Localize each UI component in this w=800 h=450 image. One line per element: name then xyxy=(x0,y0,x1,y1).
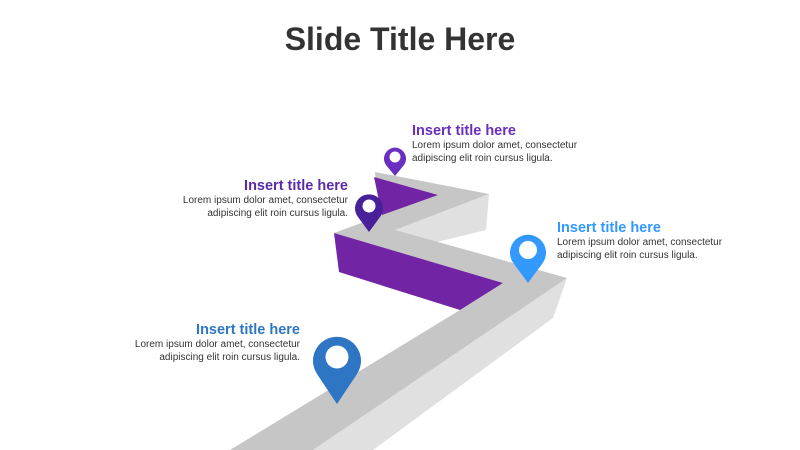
text: step 3: Lorem ipsum dolor amet, consectetur xyxy=(183,195,348,206)
text: step 1: Insert title here xyxy=(196,322,300,338)
pin: step 4 xyxy=(384,148,406,176)
pin: step 1 xyxy=(313,337,361,404)
text: step 1: adipiscing elit roin cursus ligula. xyxy=(159,352,300,362)
text: step 1: Lorem ipsum dolor amet, consectetur xyxy=(135,339,300,350)
text: step 4: Insert title here xyxy=(412,123,516,139)
text: step 2 xyxy=(557,220,722,260)
text: step 3: adipiscing elit roin cursus ligula. xyxy=(207,208,348,218)
pin: step 2 xyxy=(510,235,546,283)
text: step 1 xyxy=(135,322,300,362)
text: step 2: Insert title here xyxy=(557,220,661,236)
title: Slide Title Here xyxy=(285,21,515,57)
text: step 4 xyxy=(412,123,577,164)
text: step 4: adipiscing elit roin cursus ligula. xyxy=(412,152,553,164)
text: step 2: adipiscing elit roin cursus ligula. xyxy=(557,250,698,260)
text: step 4: Lorem ipsum dolor amet, consectetur xyxy=(412,140,577,151)
text: step 3 xyxy=(183,178,348,218)
text: step 2: Lorem ipsum dolor amet, consectetur xyxy=(557,237,722,248)
pin: step 3 xyxy=(355,194,383,232)
text: step 3: Insert title here xyxy=(244,178,348,194)
